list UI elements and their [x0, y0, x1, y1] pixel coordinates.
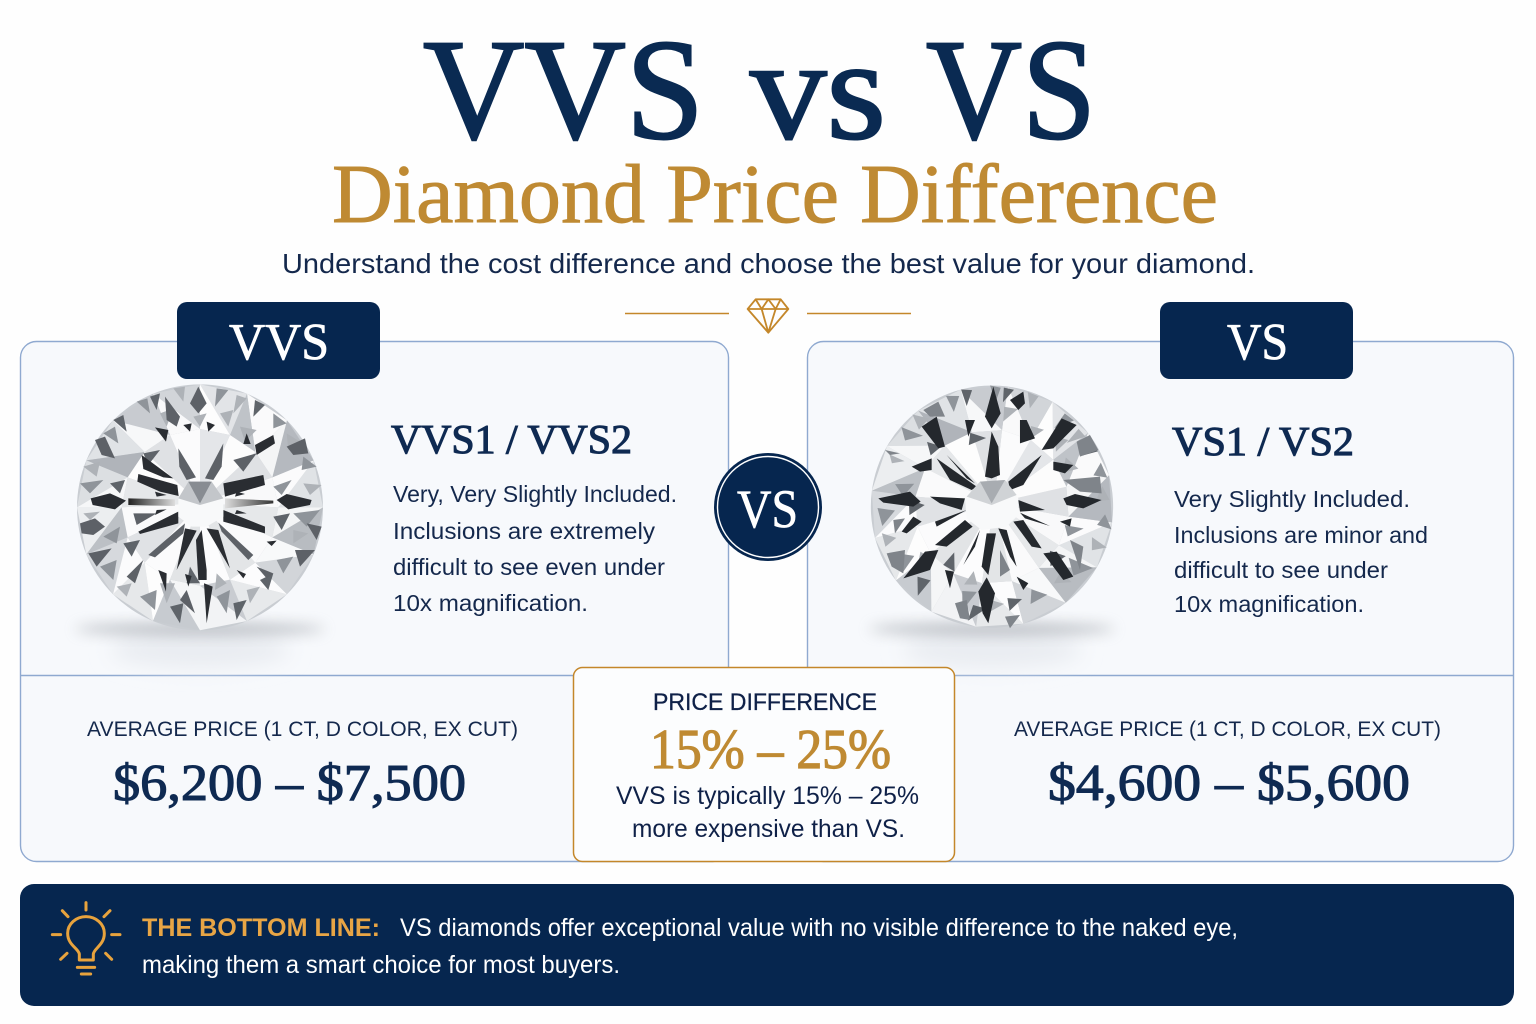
callout note: more expensive than VS. — [632, 815, 905, 843]
price: VVS: AVERAGE PRICE (1 CT, D COLOR, EX CUT) — [87, 717, 518, 741]
description: VVS: Very, Very Slightly Included. — [393, 481, 677, 507]
diamond image: VVS — [77, 384, 323, 630]
badge: VS: VS — [1227, 314, 1288, 371]
shadow under VS diamond — [869, 623, 1115, 635]
description: VS — [1174, 486, 1428, 617]
callout value: 15% – 25% — [650, 719, 891, 781]
price: VS — [1014, 717, 1441, 812]
bottom line text: THE BOTTOM LINE: — [142, 914, 380, 942]
title: VVS vs VS: VVS — [423, 11, 704, 170]
description: VVS: Inclusions are extremely — [393, 518, 655, 544]
diamond image: VS — [827, 341, 1157, 672]
tagline: Understand the cost difference and choose the best value for your diamond. — [282, 248, 1255, 279]
badge: VS — [1160, 302, 1353, 379]
callout note: VVS is typically 15% – 25% — [616, 782, 919, 810]
description: VS: Very Slightly Included. — [1174, 486, 1410, 512]
table centre — [965, 482, 1018, 530]
bottom line banner — [20, 884, 1514, 1006]
title: VVS vs VS: VS — [926, 11, 1096, 170]
subtitle: Diamond Price Difference: Diamond Price Difference — [332, 148, 1218, 241]
title: VVS vs VS — [423, 11, 1096, 170]
shadow under VVS diamond — [75, 623, 325, 635]
badge: VVS: VVS — [229, 314, 329, 371]
heading: VS1 / VS2: VS1 / VS2 — [1172, 418, 1354, 464]
description: VS: 10x magnification. — [1174, 591, 1364, 617]
heading: VVS1 / VVS2: VVS1 / VVS2 — [391, 416, 632, 462]
description: VVS: difficult to see even under — [393, 554, 665, 580]
VS circle badge — [714, 453, 822, 561]
divider with diamond icon — [625, 299, 911, 333]
description: VS: difficult to see under — [1174, 557, 1388, 583]
badge: VVS — [177, 302, 380, 379]
bottom line text: VS diamonds offer exceptional value with no visible difference to the naked eye, — [400, 914, 1238, 942]
description: VVS — [393, 481, 677, 616]
callout label: PRICE DIFFERENCE — [653, 689, 877, 716]
panel: VVS — [20, 302, 728, 862]
title: VVS vs VS: vs — [750, 11, 886, 170]
callout note — [616, 782, 919, 843]
icon: light bulb — [52, 903, 120, 974]
callout: price difference — [574, 668, 954, 862]
reflection under VS diamond — [902, 632, 1082, 668]
price: VVS — [87, 717, 518, 812]
table centre — [178, 482, 223, 527]
price: VVS: $6,200 – $7,500 — [113, 755, 466, 812]
description: VVS: 10x magnification. — [393, 590, 588, 616]
bottom line text: making them a smart choice for most buyers. — [142, 951, 620, 979]
price: VS: $4,600 – $5,600 — [1048, 755, 1410, 812]
price: VS: AVERAGE PRICE (1 CT, D COLOR, EX CUT) — [1014, 717, 1441, 741]
bottom line text — [142, 914, 1238, 979]
panel: VS — [808, 302, 1514, 862]
VS circle badge: VS — [737, 479, 798, 539]
description: VS: Inclusions are minor and — [1174, 522, 1428, 548]
reflection under VVS diamond — [110, 632, 290, 668]
